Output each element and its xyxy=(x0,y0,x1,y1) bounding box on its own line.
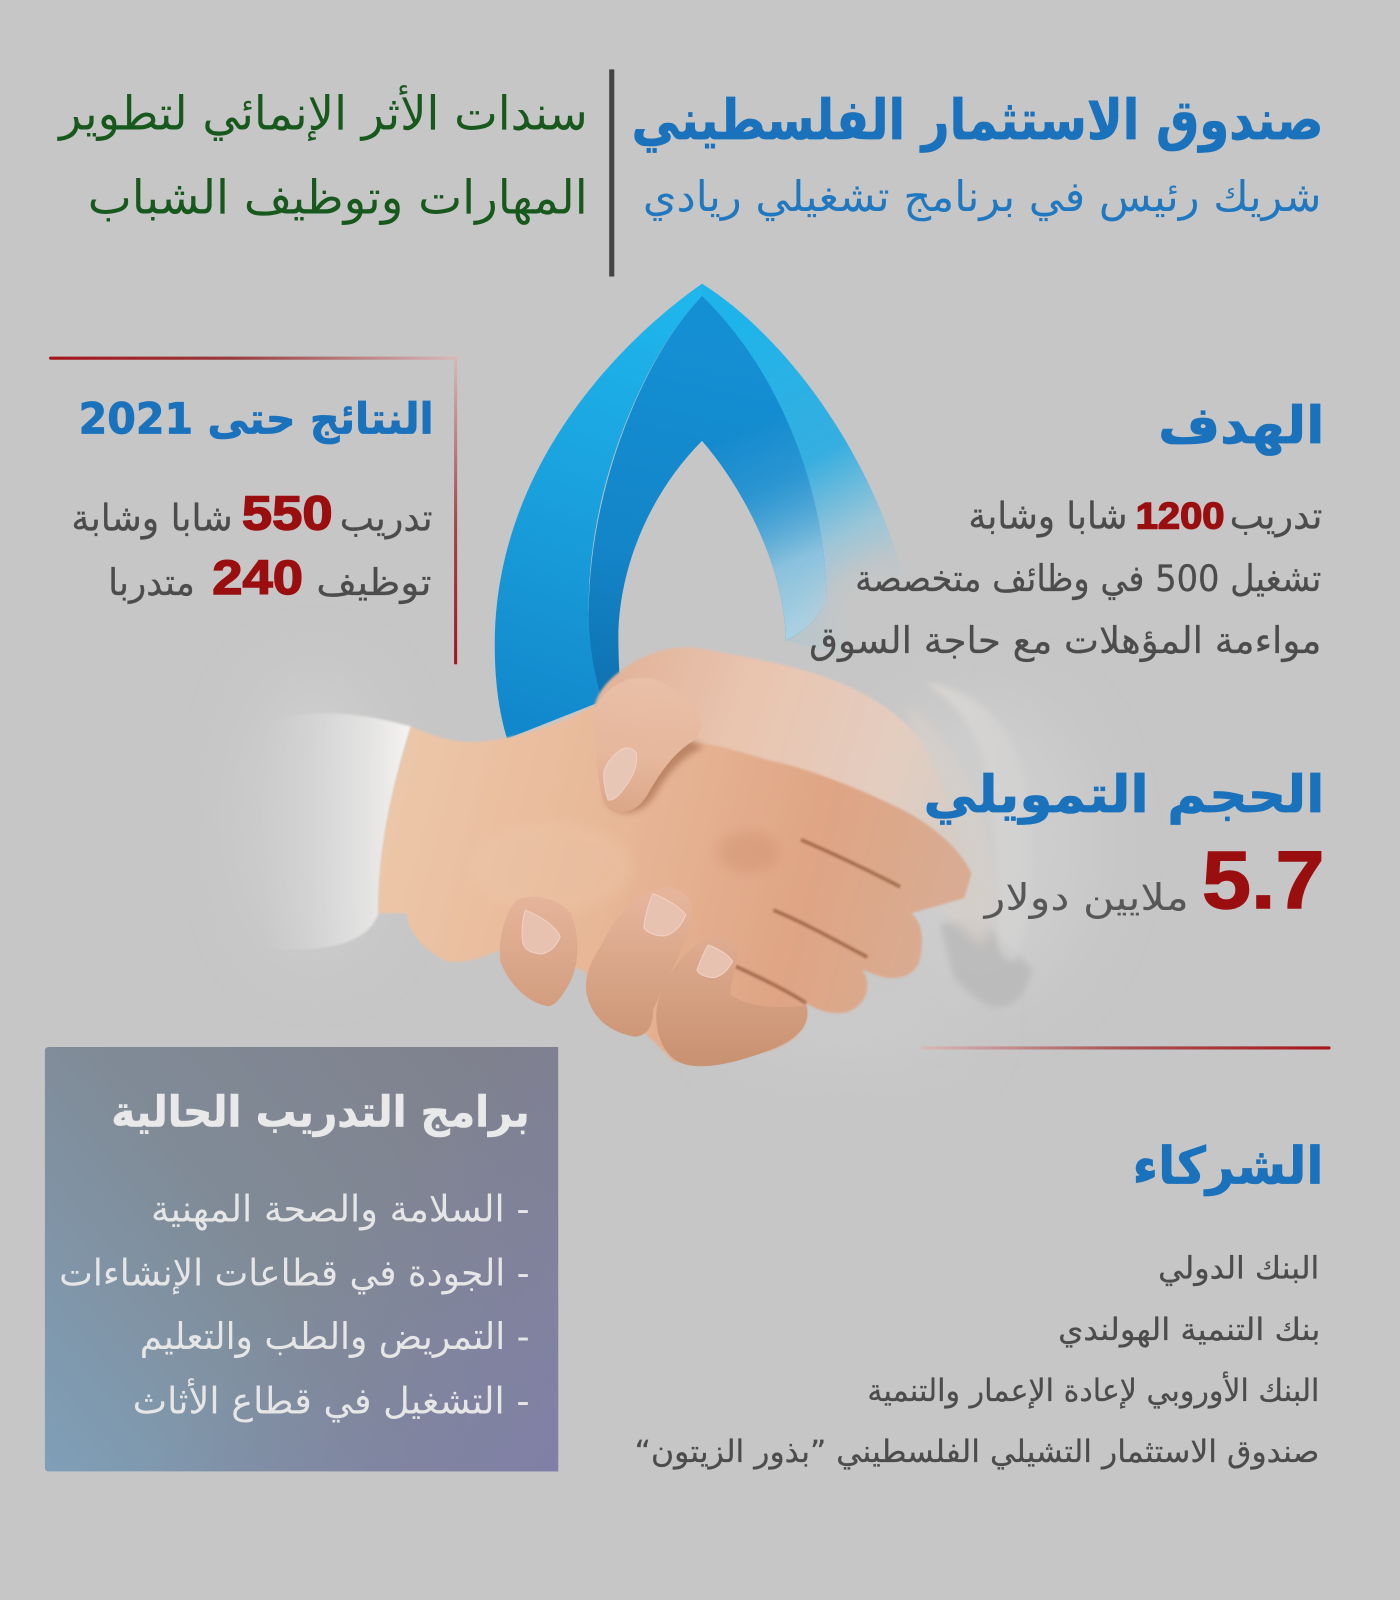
results line 2: متدربا xyxy=(108,561,195,604)
results line 2: توظيف xyxy=(316,561,432,604)
header: bond name xyxy=(57,84,588,225)
partner 3: البنك الأوروبي لإعادة الإعمار والتنمية xyxy=(867,1371,1319,1409)
programme 3: - التمريض والطب والتعليم xyxy=(140,1315,530,1358)
icon: blue arch logo xyxy=(495,284,949,739)
goal line 1: 1200 xyxy=(1136,496,1224,537)
results line 1 xyxy=(71,488,433,541)
finger 2 nail xyxy=(644,894,686,936)
panel: partners xyxy=(635,1138,1323,1470)
subtitle: شريك رئيس في برنامج تشغيلي ريادي xyxy=(643,172,1321,222)
right hand palm xyxy=(593,647,969,873)
partner 4: صندوق الاستثمار التشيلي الفلسطيني ”بذور الزيتون“ xyxy=(635,1435,1319,1470)
goal line 2: تشغيل 500 في وظائف متخصصة xyxy=(855,557,1321,600)
right cuff xyxy=(927,684,1033,961)
programme 1: - السلامة والصحة المهنية xyxy=(151,1187,530,1230)
goal line 3: مواءمة المؤهلات مع حاجة السوق xyxy=(809,619,1321,662)
header: fund title xyxy=(632,88,1323,222)
goal line 1: شابا وشابة xyxy=(968,495,1128,538)
divider rule xyxy=(921,1046,1331,1049)
funding heading: الحجم التمويلي xyxy=(923,766,1324,825)
finger 3 xyxy=(656,937,807,1066)
panel: current training programmes xyxy=(45,1047,558,1471)
partner 2: بنك التنمية الهولندي xyxy=(1058,1313,1320,1348)
results line 1: شابا وشابة xyxy=(71,497,233,540)
funding amount: 5.7 xyxy=(1202,835,1324,926)
panel: funding size xyxy=(923,766,1324,926)
programme 4: - التشغيل في قطاع الأثاث xyxy=(133,1377,530,1422)
programme 2: - الجودة في قطاعات الإنشاءات xyxy=(59,1252,530,1295)
panel background xyxy=(45,1047,558,1471)
thumb shadow xyxy=(604,737,704,813)
arch left outer band xyxy=(495,284,702,739)
right palm ghost xyxy=(908,704,995,944)
goal line 1: تدريب xyxy=(1230,495,1322,538)
panel heading: برامج التدريب الحالية xyxy=(111,1088,530,1138)
thumb nail xyxy=(604,748,637,800)
results line 1: تدريب xyxy=(340,497,433,540)
results line 2 xyxy=(108,552,432,605)
corner rule vertical xyxy=(454,356,457,664)
right cuff shadow xyxy=(940,918,1033,1007)
title: صندوق الاستثمار الفلسطيني xyxy=(632,88,1323,153)
finger gaps xyxy=(736,840,900,1003)
finger 1 xyxy=(500,897,577,1006)
finger 3 nail xyxy=(697,945,733,978)
panel: goal xyxy=(809,397,1324,662)
corner rule horizontal xyxy=(49,357,456,360)
results line 2: 240 xyxy=(212,552,303,605)
goal line 1 xyxy=(968,495,1322,538)
arch inner band xyxy=(589,296,827,706)
arch inner band fade xyxy=(702,296,827,641)
left hand back xyxy=(379,706,971,1061)
partners heading: الشركاء xyxy=(1133,1138,1323,1197)
funding unit: ملايين دولار xyxy=(982,876,1189,919)
header divider xyxy=(609,69,614,277)
goal heading: الهدف xyxy=(1158,397,1324,456)
knuckle shading xyxy=(717,832,779,872)
partner 1: البنك الدولي xyxy=(1158,1252,1319,1287)
handshake illustration xyxy=(245,647,1092,1066)
arch right outer band xyxy=(702,284,902,653)
results line 1: 550 xyxy=(242,488,333,541)
panel: results to 2021 xyxy=(49,356,457,664)
finger 2 xyxy=(586,887,692,1037)
thumb xyxy=(593,678,701,812)
left cuff xyxy=(260,713,411,949)
results heading: النتائج حتى 2021 xyxy=(79,395,434,445)
bond name line 2: المهارات وتوظيف الشباب xyxy=(88,170,588,225)
finger 1 nail xyxy=(522,910,560,954)
bond name line 1: سندات الأثر الإنمائي لتطوير xyxy=(57,84,588,142)
soft halo around hands xyxy=(245,673,388,959)
arch fade to background xyxy=(822,559,949,686)
